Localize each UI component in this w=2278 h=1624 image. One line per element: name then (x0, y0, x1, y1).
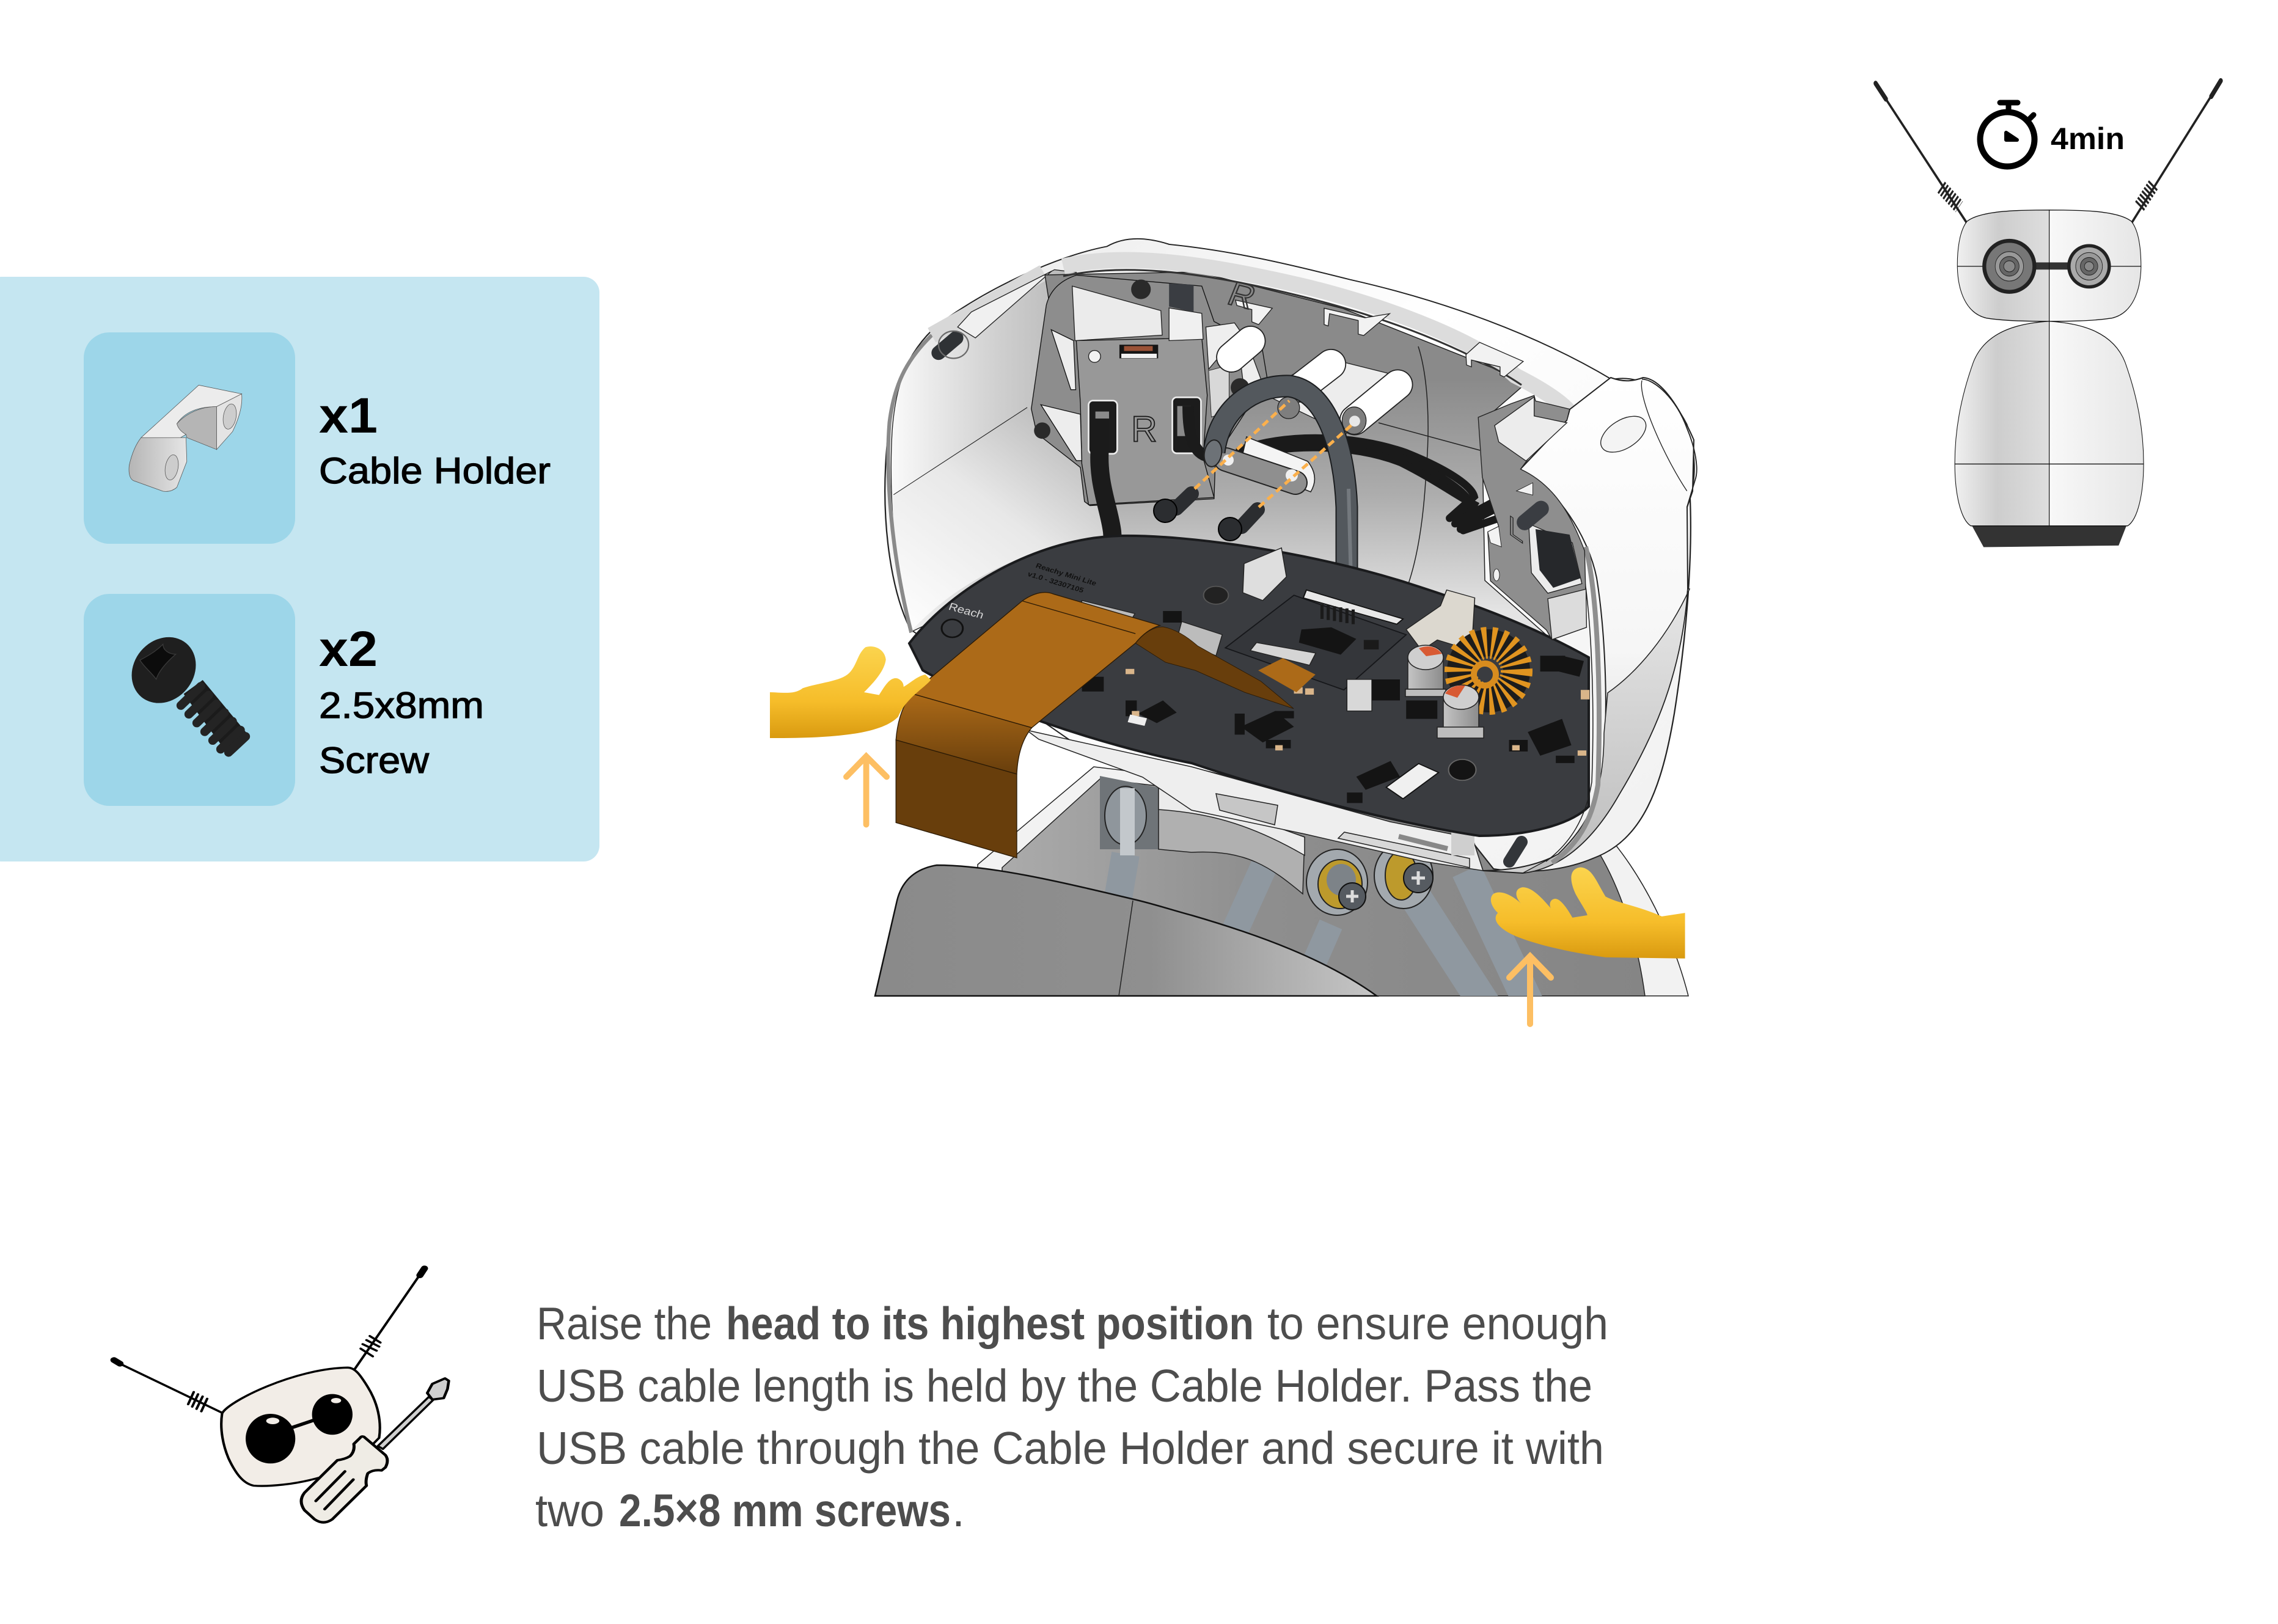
right USB lead (1188, 406, 1209, 456)
capacitors (1405, 645, 1484, 738)
black wire bundle (1240, 438, 1499, 530)
robot eyes (1982, 239, 2111, 294)
robot body (1955, 321, 2144, 526)
mascot antennas (113, 1268, 425, 1413)
white header (1243, 548, 1286, 601)
instruction text: to ensure enough (1267, 1298, 1608, 1349)
neck bolts (1306, 843, 1433, 915)
panel: parts list (0, 277, 599, 861)
assembly screws (1154, 494, 1258, 541)
chips and small parts (1082, 611, 1584, 803)
dashed guide lines (1195, 401, 1354, 507)
head shell (885, 239, 1694, 871)
neck mount (1159, 785, 1305, 894)
instruction text: head to its highest position (726, 1298, 1254, 1349)
instruction text: two (535, 1485, 604, 1536)
lip clips (1236, 300, 1523, 377)
robot overview (1875, 81, 2221, 547)
daughter board (1225, 590, 1474, 711)
interior left wall (888, 269, 1126, 632)
centre seam (2048, 210, 2050, 526)
label: x2: x2 (319, 621, 378, 677)
cable holder part (1223, 437, 1314, 492)
front body shell (875, 865, 1377, 996)
left rail clip (958, 271, 1052, 338)
mascot with screwdriver (113, 1268, 449, 1523)
antennas (1875, 81, 2221, 223)
mascot head (221, 1367, 380, 1486)
robot base (1972, 526, 2126, 547)
standoff tubes (1231, 341, 1412, 434)
board lettering: v1.0 - 32307105 (1027, 570, 1085, 594)
mascot eyes (246, 1394, 353, 1463)
under-board tray (1027, 730, 1522, 871)
instruction text: USB cable length is held by the Cable Holder. Pass the (537, 1360, 1592, 1411)
instruction text: . (952, 1485, 965, 1536)
left hand (770, 646, 931, 738)
plate letter R: R (1131, 410, 1157, 450)
label: x1: x1 (319, 388, 378, 444)
grey USB cable (1202, 386, 1352, 605)
USB ports (1088, 401, 1117, 454)
USB C ports (1079, 601, 1222, 656)
left black cable (1099, 419, 1113, 602)
left ball joint (1100, 776, 1161, 855)
board lettering (1027, 561, 1098, 594)
neck rods (1118, 854, 1534, 1014)
bracket letter L: L (1508, 508, 1523, 550)
board logo text: Reach (947, 601, 986, 621)
head right front shell (1483, 378, 1694, 873)
head ear bump (1595, 379, 1697, 507)
wall seams and top lip (1063, 260, 1572, 583)
back body dome and neck cavity (978, 767, 1688, 996)
left arrow (846, 756, 887, 825)
part tile: screw (84, 594, 295, 806)
board slot behind daughter board (1303, 590, 1403, 624)
robot head (1957, 210, 2141, 321)
circuit board (909, 536, 1589, 836)
flex ribbon orange (896, 593, 1316, 858)
right hand (1491, 868, 1685, 959)
toroid inductor (1460, 643, 1517, 699)
stopwatch icon (1980, 103, 2035, 166)
right arrow (1509, 956, 1551, 1024)
instruction text: Raise the (537, 1298, 712, 1349)
left pin (939, 338, 956, 353)
status slot (1119, 345, 1158, 359)
label: Screw: Screw (319, 740, 430, 781)
right side connector bracket (1478, 395, 1586, 640)
instruction text: 2.5×8 mm screws (619, 1485, 951, 1536)
connector bracket (939, 275, 1267, 506)
part tile: cable holder (84, 332, 295, 544)
screwdriver (301, 1378, 449, 1523)
interior back wall (1045, 272, 1550, 648)
label: 2.5x8mm: 2.5x8mm (319, 685, 484, 726)
main illustration: open robot head with PCB (770, 239, 1697, 1024)
label: Cable Holder: Cable Holder (319, 450, 551, 491)
instruction text (535, 1298, 1608, 1536)
instruction text: USB cable through the Cable Holder and secure it with (537, 1422, 1604, 1474)
board lettering: Reachy Mini Lite (1035, 561, 1098, 587)
time label: 4min (2051, 122, 2125, 156)
wall letter R: R (1223, 274, 1261, 316)
